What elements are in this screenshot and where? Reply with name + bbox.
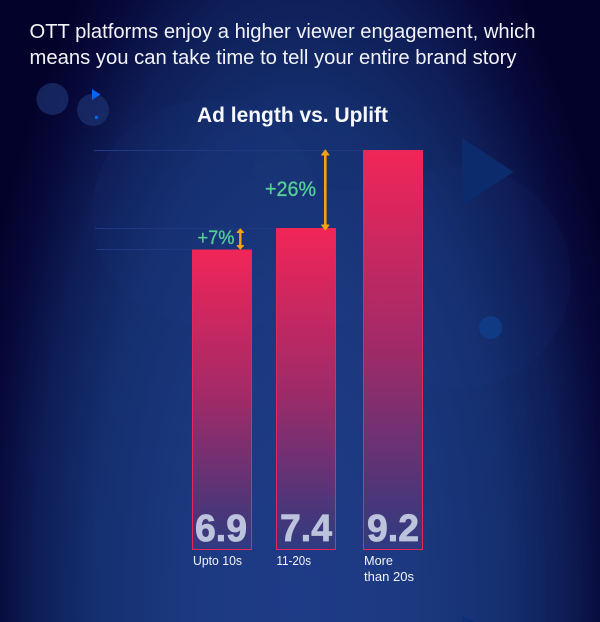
- bar: Upto 10s: [192, 250, 252, 568]
- decorative blob: [92, 100, 571, 388]
- decorative circles top left: [36, 83, 109, 126]
- bar: 11-20s: [276, 228, 336, 568]
- bar: 11-20s: 11-20s: [276, 554, 311, 568]
- bar: More than 20s: 9.2: [367, 508, 419, 550]
- decorative triangle bottom: [462, 615, 475, 622]
- bar: 11-20s: 7.4: [280, 508, 332, 550]
- bar: More than 20s: than 20s: [364, 570, 414, 584]
- callout: +26%: [265, 150, 329, 230]
- bar chart: [192, 150, 422, 584]
- gridlines: [94, 150, 363, 250]
- callout: +7%: +7%: [198, 227, 234, 249]
- callout: +26%: +26%: [265, 178, 316, 201]
- text: means you can take time to tell your entire brand story: [30, 47, 517, 69]
- intro text: OTT platforms enjoy a higher viewer engagement, which: [30, 21, 536, 43]
- decorative circle right: [479, 316, 502, 339]
- decorative play triangle: [462, 138, 514, 205]
- chart title: Ad length vs. Uplift: [197, 104, 388, 127]
- bar: Upto 10s: Upto 10s: [193, 554, 242, 568]
- bar: More than 20s: More: [364, 554, 393, 568]
- bar: More than 20s: [364, 150, 422, 584]
- bar: Upto 10s: 6.9: [195, 508, 247, 550]
